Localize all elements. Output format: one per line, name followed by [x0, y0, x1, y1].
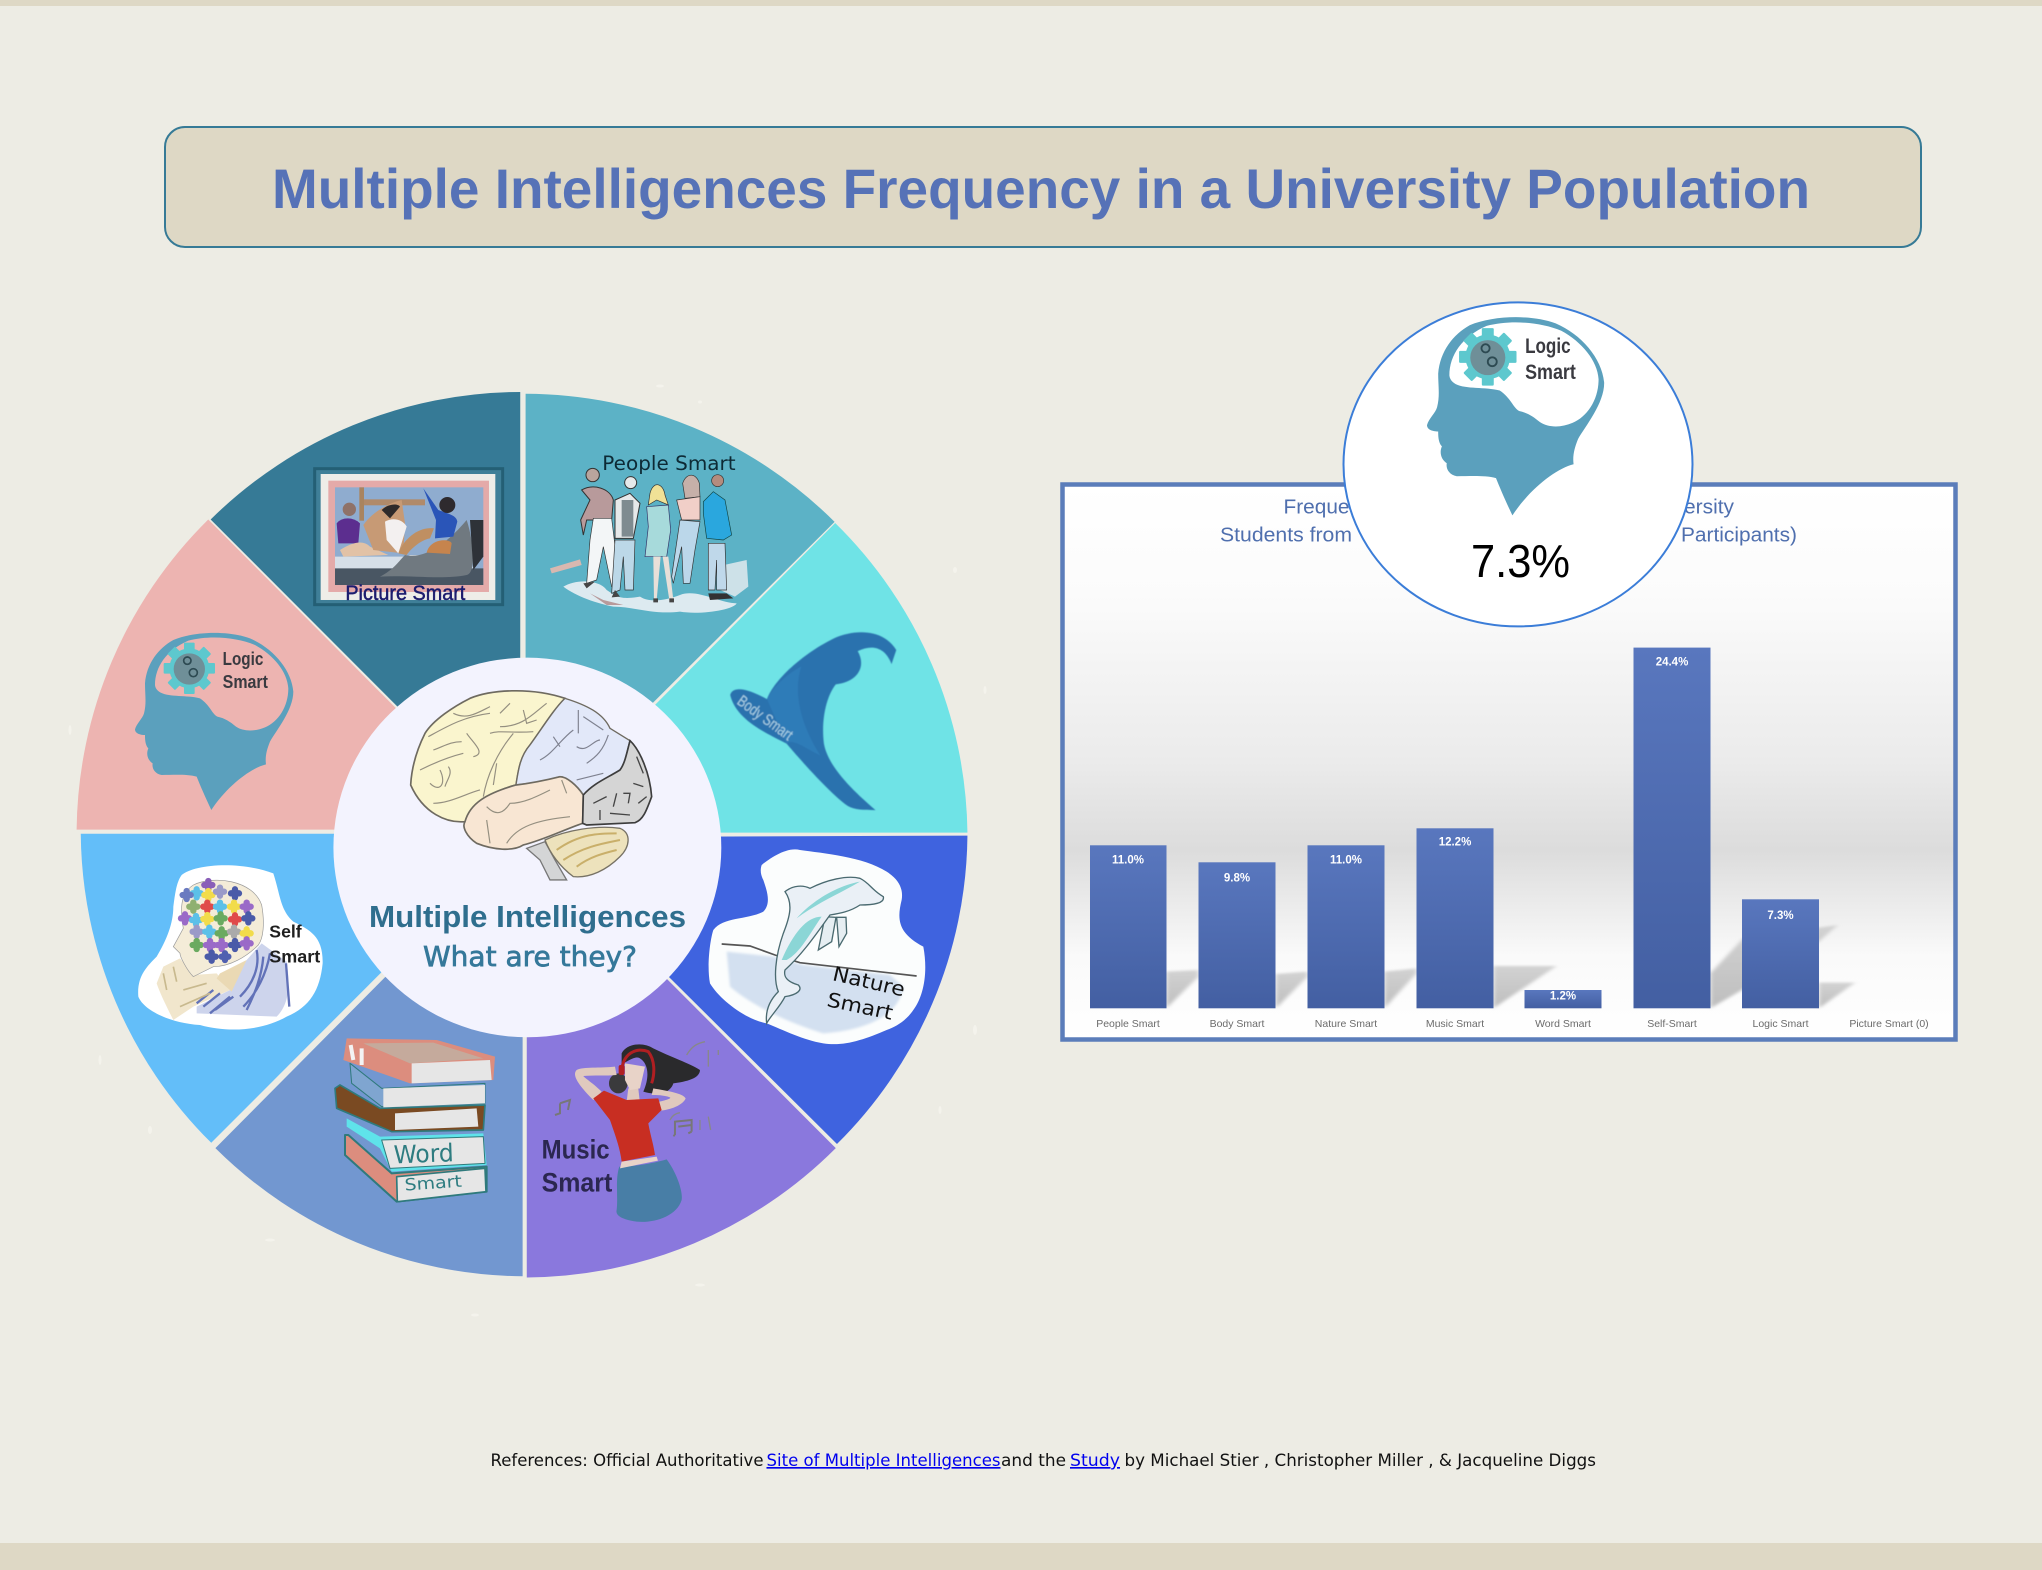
- title banner: [165, 127, 1921, 247]
- icon: logic smart head large: [1427, 317, 1604, 515]
- references: and the: [1001, 1451, 1066, 1470]
- value labels: 11.0%: [1330, 854, 1362, 866]
- wedge: people smart: [526, 394, 835, 830]
- label: logic smart: [223, 648, 268, 692]
- category labels: Word Smart: [1535, 1018, 1591, 1030]
- value labels: 7.3%: [1767, 910, 1794, 922]
- value labels: 24.4%: [1656, 657, 1688, 669]
- bar: logic smart: [1742, 899, 1819, 1008]
- category labels: Nature Smart: [1315, 1018, 1377, 1030]
- icon: self smart: [138, 865, 323, 1030]
- wedge: word smart: [215, 839, 523, 1276]
- wedge: body smart: [529, 523, 967, 833]
- value labels: 12.2%: [1439, 837, 1471, 849]
- icon: word smart books: [335, 1038, 495, 1202]
- chart title fragments: ersity: [1684, 496, 1734, 518]
- label: self smart: Smart: [269, 947, 321, 967]
- label: logic smart large: Logic: [1525, 335, 1571, 358]
- label: music smart: Music: [542, 1134, 610, 1164]
- label: music smart: Smart: [542, 1168, 612, 1198]
- value labels: 11.0%: [1112, 854, 1144, 866]
- top band: [0, 0, 2042, 6]
- label: body smart: Body Smart: [734, 693, 796, 744]
- label: people smart: People Smart: [602, 452, 736, 475]
- label: logic smart: Logic: [223, 648, 263, 669]
- category labels: Body Smart: [1210, 1018, 1265, 1030]
- label: nature smart: Smart: [825, 987, 895, 1025]
- wedge: picture smart: [211, 392, 520, 830]
- value labels: 1.2%: [1550, 990, 1576, 1002]
- icon: picture smart: [315, 469, 503, 605]
- value labels: 9.8%: [1224, 873, 1250, 885]
- category labels: [1096, 1018, 1929, 1030]
- callout value: 7.3%: [1471, 535, 1570, 587]
- icon: body smart silhouette: [730, 632, 896, 810]
- label: self smart: [269, 921, 321, 967]
- label: word smart: Word: [393, 1138, 454, 1169]
- label: self smart: Self: [269, 921, 302, 941]
- references: References: Official Authoritative: [490, 1451, 764, 1470]
- label: logic smart: Smart: [223, 671, 268, 692]
- puzzle pieces: [181, 881, 252, 961]
- references: [490, 1451, 1596, 1470]
- label: music smart: [542, 1134, 612, 1198]
- bar: music smart: [1416, 828, 1494, 1008]
- chart title fragments: [1220, 496, 1797, 546]
- icon: people smart: [550, 452, 748, 613]
- category labels: Self-Smart: [1647, 1018, 1697, 1030]
- icon: gear large: [1459, 328, 1517, 386]
- chart title fragments: Freque: [1284, 496, 1350, 518]
- callout: logic smart 7.3%: [1344, 302, 1692, 626]
- bar shadows: [1166, 925, 1855, 1008]
- bar: people smart: [1090, 845, 1166, 1008]
- chart panel: [1062, 484, 1956, 1040]
- label: logic smart large: Smart: [1525, 361, 1576, 384]
- value labels: [1112, 657, 1794, 1002]
- references: Site of Multiple Intelligences: [766, 1451, 1000, 1470]
- references: Study: [1070, 1451, 1120, 1470]
- center heading: Multiple Intelligences: [369, 899, 686, 934]
- label: word smart: Smart: [404, 1172, 463, 1195]
- icon: music smart dancer: [542, 1042, 718, 1222]
- center subheading: What are they?: [423, 940, 637, 973]
- category labels: Logic Smart: [1752, 1018, 1809, 1030]
- wheel diagram: [68, 384, 986, 1316]
- wedge: nature smart: [529, 836, 967, 1144]
- brain illustration: [411, 691, 652, 880]
- category labels: Picture Smart (0): [1849, 1018, 1929, 1030]
- chart title fragments: Students from: [1220, 524, 1352, 546]
- icon: nature smart dolphin: [709, 849, 925, 1044]
- chart title fragments: Participants): [1681, 524, 1797, 546]
- bottom band: [0, 1543, 2042, 1570]
- bar: self smart: [1634, 648, 1710, 1008]
- category labels: People Smart: [1096, 1018, 1160, 1030]
- label: picture smart: Picture Smart: [345, 581, 465, 605]
- wedge: logic smart: [77, 519, 517, 830]
- label: nature smart: Nature: [831, 961, 907, 1001]
- center disc: [333, 658, 721, 1037]
- bar: word smart: [1524, 990, 1602, 1008]
- label: nature smart: [825, 961, 907, 1025]
- bar: nature smart: [1308, 845, 1384, 1008]
- bar: body smart: [1198, 862, 1276, 1008]
- decorative speckles: [68, 384, 986, 1316]
- wedge: music smart: [527, 839, 836, 1277]
- label: word smart: [393, 1138, 463, 1195]
- category labels: Music Smart: [1426, 1018, 1484, 1030]
- title: Multiple Intelligences Frequency in a University Population: [272, 157, 1810, 220]
- references: by Michael Stier , Christopher Miller , & Jacqueline Diggs: [1124, 1451, 1596, 1470]
- wedge: self smart: [81, 834, 520, 1143]
- label: logic smart large: [1525, 335, 1576, 384]
- icon: logic smart head: [135, 633, 293, 810]
- icon: gear: [164, 643, 215, 694]
